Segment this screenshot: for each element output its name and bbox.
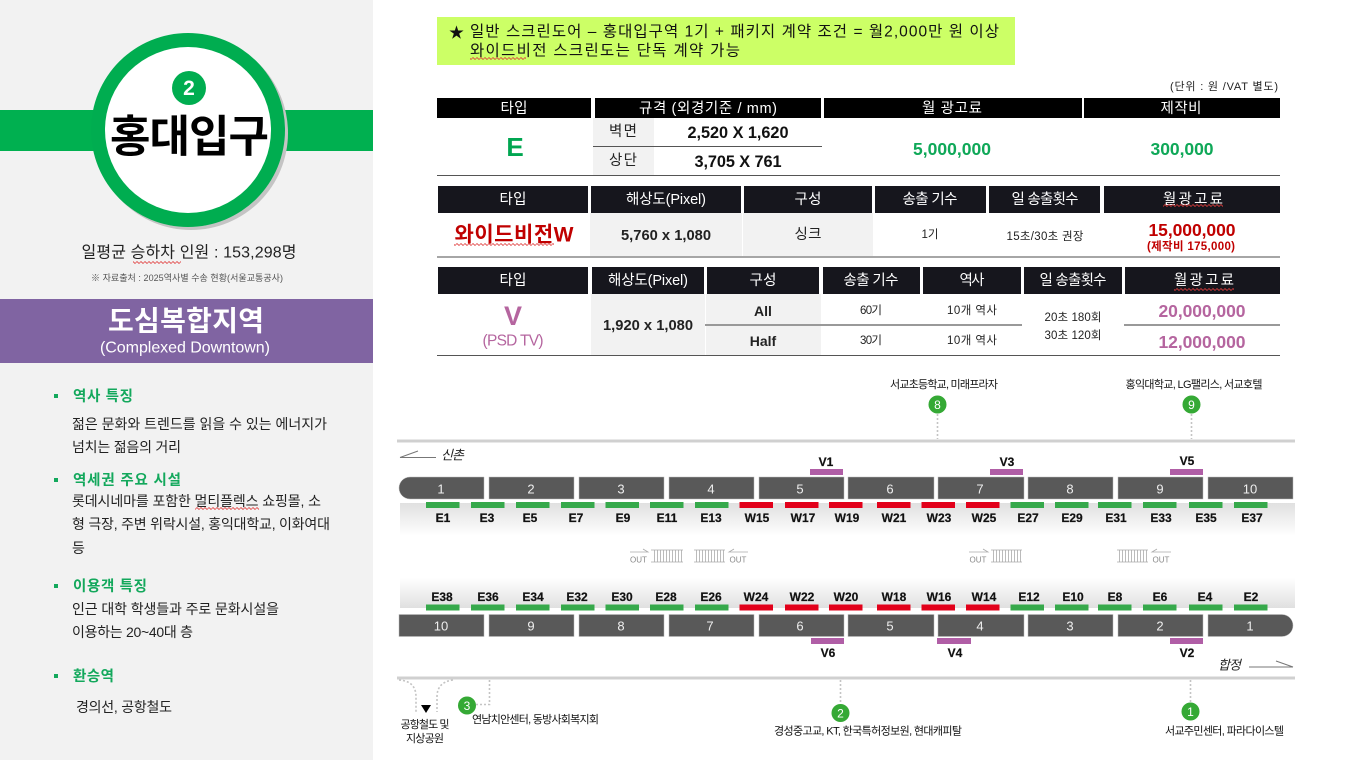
- table: V PSD TV pricing: All: [754, 303, 772, 319]
- station feature: customers: 이용객 특징: [73, 578, 147, 595]
- station feature: history: 넘치는 젊음의 거리: [72, 439, 181, 455]
- table: type E pricing: 월 광고료: [922, 100, 982, 117]
- top door labels: E7: [569, 511, 584, 525]
- V4 marker: [937, 638, 971, 660]
- top door labels: E13: [700, 511, 722, 525]
- station feature: history: [54, 388, 327, 455]
- V5 marker: V5: [1180, 454, 1195, 468]
- direction: Sinchon: [400, 447, 465, 462]
- top door labels: W25: [972, 511, 997, 525]
- station feature: customers: 이용하는 20~40대 층: [72, 624, 193, 640]
- platform gradient bands: [400, 503, 1295, 608]
- station circle badge: [91, 33, 288, 230]
- exit 2 callout: 경성중고교, KT, 한국특허정보원, 현대캐피탈: [774, 724, 962, 737]
- table: V PSD TV pricing: 구성: [750, 272, 776, 289]
- panel: station sidebar: [0, 0, 373, 760]
- exit 3 callout: 3: [464, 699, 471, 713]
- table: type E pricing: 상단: [609, 152, 637, 169]
- table: type E pricing: 벽면: [609, 123, 637, 140]
- V5 marker: [1170, 454, 1203, 475]
- table: V PSD TV pricing: 60기: [860, 304, 882, 317]
- exit stairs: OUT 2: OUT: [730, 555, 747, 564]
- icon: line number 2: [172, 71, 206, 105]
- table: wide vision W pricing: 5,760 x 1,080: [621, 228, 711, 244]
- bottom car numbers: 8: [617, 618, 625, 633]
- exit 3 callout: 연남치안센터, 동방사회복지회: [472, 713, 599, 726]
- bottom door labels: E10: [1062, 590, 1084, 604]
- top door labels: W15: [745, 511, 770, 525]
- data source note: ※ 자료출처 : 2025역사별 수송 현황(서울교통공사): [91, 272, 283, 283]
- bottom door labels: W20: [834, 590, 859, 604]
- top car numbers: 5: [796, 481, 804, 496]
- top door labels: E11: [657, 511, 678, 525]
- table: wide vision W pricing: 월광고료: [1163, 191, 1223, 208]
- top car numbers: [437, 481, 1257, 496]
- V1 marker: [810, 455, 843, 475]
- table: wide vision W pricing: 15초/30초 권장: [1006, 230, 1084, 243]
- bottom wall line: [397, 676, 1295, 680]
- table: V PSD TV pricing: (PSD TV): [482, 332, 544, 349]
- platform diagram: [397, 377, 1295, 745]
- bottom door labels: W18: [882, 590, 907, 604]
- bottom door labels: E32: [566, 590, 588, 604]
- exit 1 callout: 서교주민센터, 파라다이스텔: [1165, 724, 1284, 737]
- unit note: (단위 : 원 /VAT 별도): [1170, 80, 1278, 93]
- top car numbers: 7: [976, 481, 984, 496]
- table: V PSD TV pricing: 30초 120회: [1044, 329, 1102, 342]
- line 2 green band: [0, 110, 373, 151]
- bottom door labels: E8: [1108, 590, 1123, 604]
- exit 9 callout: [1126, 377, 1262, 439]
- station feature: transfer: [54, 668, 172, 715]
- table: V PSD TV pricing: 해상도(Pixel): [608, 272, 688, 289]
- table: V PSD TV pricing: 역사: [960, 272, 984, 289]
- top door labels: E29: [1061, 511, 1083, 525]
- station feature: history: 젊은 문화와 트렌드를 읽을 수 있는 에너지가: [72, 416, 327, 432]
- airport railroad exit: [399, 680, 453, 745]
- bottom door labels: E28: [655, 590, 677, 604]
- callout: package contract conditions: 일반 스크린도어 – 홍대입구역 1기 + 패키지 계약 조건 = 월2,000만 원 이상: [470, 22, 999, 40]
- exit 9 callout: 홍익대학교, LG팰리스, 서교호텔: [1126, 377, 1262, 391]
- exit stairs: OUT 1: [630, 549, 683, 564]
- station feature: customers: 인근 대학 학생들과 주로 문화시설을: [72, 601, 279, 617]
- table: V PSD TV pricing: 10개 역사: [947, 304, 997, 317]
- daily passengers: 일평균 승하차 인원 : 153,298명: [82, 243, 296, 261]
- top car numbers: 8: [1066, 481, 1074, 496]
- station feature: facilities: 형 극장, 주변 위락시설, 홍익대학교, 이화여대: [72, 516, 330, 532]
- top car numbers: 10: [1243, 481, 1257, 496]
- top door labels: W19: [835, 511, 860, 525]
- table: V PSD TV pricing: Half: [750, 333, 777, 349]
- table: type E pricing: [437, 98, 1280, 176]
- top door labels: E5: [523, 511, 538, 525]
- top train cars 1 to 10: [399, 477, 1293, 499]
- airport railroad exit: 지상공원: [406, 732, 444, 745]
- area type banner: [0, 299, 373, 363]
- bottom door labels: E36: [477, 590, 499, 604]
- area type banner: (Complexed Downtown): [100, 339, 270, 356]
- bottom door labels: E6: [1153, 590, 1168, 604]
- bottom car numbers: 2: [1156, 618, 1164, 633]
- table: wide vision W pricing: 와이드비전W: [454, 223, 574, 246]
- table: V PSD TV pricing: 30기: [860, 334, 882, 347]
- bottom door labels: W24: [744, 590, 769, 604]
- bottom door labels: E26: [700, 590, 722, 604]
- top car numbers: 1: [437, 481, 445, 496]
- bottom door labels: E4: [1198, 590, 1213, 604]
- table: wide vision W pricing: 해상도(Pixel): [626, 191, 706, 208]
- table: wide vision W pricing: 타입: [500, 191, 526, 208]
- bottom door labels: E30: [611, 590, 633, 604]
- station name: 홍대입구: [110, 112, 269, 161]
- exit 2 callout: 2: [837, 706, 844, 720]
- icon: line number 2: 2: [183, 77, 195, 100]
- exit 1 callout: 1: [1187, 705, 1194, 719]
- bottom car numbers: 9: [527, 618, 535, 633]
- top car numbers: 4: [707, 481, 715, 496]
- direction: Sinchon: 신촌: [441, 447, 465, 462]
- table: V PSD TV pricing: 일 송출횟수: [1040, 272, 1106, 289]
- area type banner: 도심복합지역: [108, 305, 264, 336]
- bottom door labels: W16: [927, 590, 952, 604]
- station feature: facilities: 롯데시네마를 포함한 멀티플렉스 쇼핑몰, 소: [72, 493, 321, 509]
- table: wide vision W pricing: (제작비 175,000): [1147, 239, 1235, 253]
- exit 8 callout: 8: [934, 398, 941, 412]
- top door labels: E33: [1150, 511, 1172, 525]
- station feature: facilities: 역세권 주요 시설: [73, 472, 181, 489]
- top door labels: E3: [480, 511, 495, 525]
- bottom car numbers: [434, 618, 1254, 633]
- table: V PSD TV pricing: [437, 267, 1280, 356]
- bottom car numbers: 1: [1246, 618, 1254, 633]
- V4 marker: V4: [948, 646, 963, 660]
- table: V PSD TV pricing: 1,920 x 1,080: [603, 318, 693, 334]
- bottom door labels: [431, 590, 1259, 604]
- station feature: customers: [54, 578, 279, 640]
- table: type E pricing: 300,000: [1150, 139, 1214, 159]
- table: type E pricing: E: [506, 132, 524, 162]
- table: V PSD TV pricing: 20초 180회: [1044, 311, 1102, 324]
- table: V PSD TV pricing: 월광고료: [1174, 272, 1234, 289]
- exit 8 callout: 서교초등학교, 미래프라자: [890, 378, 998, 391]
- top door labels: E31: [1105, 511, 1127, 525]
- top door labels: W21: [882, 511, 907, 525]
- table: type E pricing: 규격 (외경기준 / mm): [639, 100, 777, 117]
- station feature: history: 역사 특징: [73, 388, 133, 405]
- table: wide vision W pricing: 구성: [794, 191, 822, 208]
- table: wide vision W pricing: 15,000,000: [1148, 220, 1236, 240]
- top door labels: W23: [927, 511, 952, 525]
- bottom door labels: E38: [431, 590, 453, 604]
- exit stairs: OUT 4: [1117, 549, 1171, 564]
- bottom door labels: W14: [972, 590, 997, 604]
- exit 3 callout: [458, 680, 599, 726]
- V6 marker: [811, 638, 844, 660]
- table: wide vision W pricing: 일 송출횟수: [1012, 191, 1078, 208]
- bottom screen door markers: [426, 604, 1268, 610]
- bottom door labels: W22: [790, 590, 815, 604]
- table: wide vision W pricing: [437, 186, 1280, 258]
- top door labels: E37: [1241, 511, 1263, 525]
- station feature: transfer: 경의선, 공항철도: [76, 699, 172, 715]
- bottom car numbers: 6: [796, 618, 804, 633]
- exit stairs: OUT 2: [694, 549, 748, 564]
- top door labels: E9: [616, 511, 631, 525]
- top screen door markers: [426, 502, 1268, 508]
- table: type E pricing: 2,520 X 1,620: [688, 124, 788, 142]
- table: V PSD TV pricing: 20,000,000: [1158, 301, 1246, 321]
- station feature: transfer: 환승역: [73, 668, 114, 685]
- V1 marker: V1: [819, 455, 834, 469]
- table: wide vision W pricing: 싱크: [794, 226, 822, 243]
- exit stairs: OUT 3: OUT: [970, 555, 987, 564]
- V2 marker: [1170, 638, 1203, 660]
- bottom door labels: E12: [1018, 590, 1040, 604]
- bottom train cars 10 to 1: [399, 614, 1293, 636]
- top door labels: E35: [1195, 511, 1217, 525]
- table: type E pricing: 제작비: [1160, 100, 1202, 117]
- V3 marker: V3: [1000, 455, 1015, 469]
- bottom car numbers: 4: [976, 618, 984, 633]
- table: wide vision W pricing: 송출 기수: [902, 191, 958, 208]
- top door labels: [436, 511, 1263, 525]
- table: type E pricing: 5,000,000: [913, 139, 991, 159]
- V6 marker: V6: [821, 646, 836, 660]
- V2 marker: V2: [1180, 646, 1195, 660]
- bottom car numbers: 5: [886, 618, 894, 633]
- exit stairs: OUT 3: [969, 549, 1022, 564]
- top car numbers: 2: [527, 481, 535, 496]
- table: V PSD TV pricing: 10개 역사: [947, 334, 997, 347]
- bottom car numbers: 3: [1066, 618, 1074, 633]
- table: V PSD TV pricing: 송출 기수: [844, 272, 898, 289]
- V3 marker: [990, 455, 1023, 475]
- top car numbers: 6: [886, 481, 894, 496]
- bottom door labels: E34: [522, 590, 544, 604]
- table: type E pricing: 3,705 X 761: [694, 153, 782, 171]
- exit 8 callout: [890, 378, 998, 439]
- callout: package contract conditions: [437, 17, 1015, 65]
- bottom door labels: E2: [1244, 590, 1259, 604]
- callout: package contract conditions: ★: [449, 24, 464, 41]
- exit 9 callout: 9: [1188, 398, 1195, 412]
- station feature: facilities: [54, 472, 330, 556]
- exit 1 callout: [1165, 680, 1284, 737]
- top car numbers: 3: [617, 481, 625, 496]
- top door labels: W17: [791, 511, 816, 525]
- exit 2 callout: [774, 680, 962, 737]
- top door labels: E1: [436, 511, 451, 525]
- bottom car numbers: 10: [434, 618, 448, 633]
- table: V PSD TV pricing: V: [504, 301, 522, 331]
- station feature: facilities: 등: [72, 540, 85, 556]
- table: V PSD TV pricing: 12,000,000: [1158, 332, 1246, 352]
- table: V PSD TV pricing: 타입: [500, 272, 526, 289]
- direction: Hapjeong: 합정: [1218, 657, 1243, 672]
- top door labels: E27: [1017, 511, 1039, 525]
- top car numbers: 9: [1156, 481, 1164, 496]
- exit stairs: OUT 4: OUT: [1153, 555, 1170, 564]
- exit stairs: OUT 1: OUT: [630, 555, 647, 564]
- callout: package contract conditions: 와이드비전 스크린도는 단독 계약 가능: [470, 41, 740, 59]
- table: wide vision W pricing: 1기: [922, 228, 938, 241]
- top wall line: [397, 440, 1295, 442]
- table: type E pricing: 타입: [500, 100, 528, 117]
- bottom car numbers: 7: [706, 618, 714, 633]
- airport railroad exit: 공항철도 및: [400, 718, 450, 731]
- direction: Hapjeong: [1218, 657, 1293, 672]
